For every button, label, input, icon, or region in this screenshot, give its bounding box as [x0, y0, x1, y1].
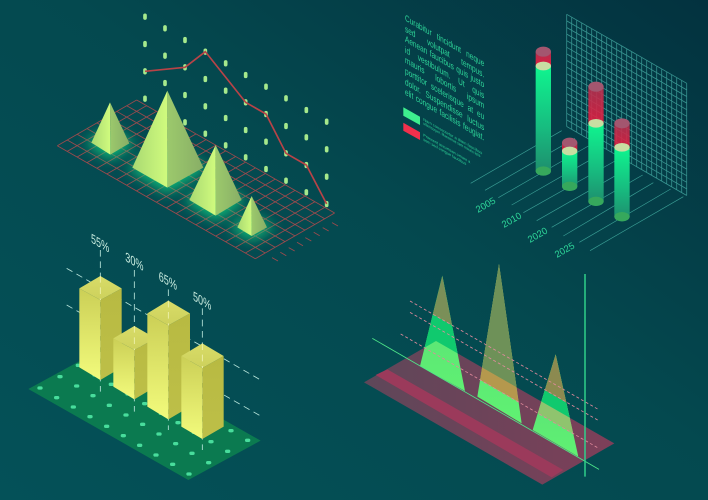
year labels: 2005: [474, 196, 498, 216]
back wall grid: [567, 14, 687, 195]
pyramid 1: [91, 102, 129, 155]
vertical axis: [583, 274, 587, 477]
year labels: 2025: [553, 241, 577, 261]
cylinder 2010: [562, 138, 577, 191]
bar 65%: [147, 301, 190, 419]
paragraph: mauris lobortis ipsum: [405, 55, 484, 111]
triangle 2: [477, 264, 522, 424]
floor grid: [57, 100, 335, 259]
panel: cylinder chart with text: [403, 12, 687, 261]
paragraph: dolor. Suspendisse luctus: [405, 76, 484, 132]
green floor: [28, 350, 261, 480]
cylinder 2020: [588, 82, 604, 206]
floor plane: [364, 341, 614, 485]
triangle 1: [420, 276, 465, 391]
legend swatch: green: [403, 107, 420, 125]
paragraph: elit congue facilisis feugiat.: [405, 87, 484, 143]
paragraph: Curabitur tincidunt neque: [405, 12, 484, 69]
floor red stripe: [376, 369, 563, 477]
baseline: [372, 338, 599, 469]
percent labels: 30%: [125, 249, 144, 275]
grid edge ticks: [272, 223, 338, 261]
paragraph: Aenean faucibus quis justo: [405, 34, 484, 90]
panel: 3D bar chart: [28, 230, 261, 480]
cylinder 2005: [536, 47, 551, 176]
year labels: [474, 196, 577, 261]
panel: triangle area chart: [360, 260, 627, 485]
legend: [403, 107, 482, 166]
panel: pyramid chart with line graph: [57, 15, 338, 261]
pyramid 3: [189, 145, 242, 216]
red line graph: [145, 52, 327, 204]
paragraph: id vestibulum. Ut quis: [405, 44, 484, 100]
year labels: 2020: [526, 226, 550, 246]
floor lines: [471, 131, 683, 251]
legend swatch: red: [403, 123, 420, 140]
percent labels: 50%: [193, 288, 212, 314]
pyramid 2: [132, 91, 203, 188]
legend text: Praesent accumsan ornare a: [423, 132, 471, 164]
paragraph: [405, 12, 486, 150]
floor dots: [39, 355, 249, 474]
year labels: 2010: [500, 211, 524, 231]
pyramid 4: [237, 196, 267, 236]
bar 55%: [79, 276, 122, 380]
bar 50%: [181, 343, 224, 439]
paragraph: porttitor scelerisque at eu: [405, 65, 484, 122]
cylinder 2025: [614, 118, 630, 221]
percent labels: [91, 230, 212, 314]
bar 30%: [113, 326, 156, 399]
legend text: Nam consectetur a diam faucibus: [423, 117, 482, 155]
legend text: ullamcorper. Maecenas sem mauris felis: [423, 121, 480, 158]
dashed guide lines: [67, 250, 261, 450]
legend text: sem sed congue faucibus: [423, 137, 466, 166]
dashed level lines: [401, 301, 599, 449]
percent labels: 55%: [91, 230, 110, 256]
percent labels: 65%: [159, 268, 177, 294]
triangle 3: [532, 354, 578, 456]
scatter dots: [145, 15, 327, 205]
paragraph: sed volutpat tempus.: [405, 23, 484, 79]
pyramid glow: [85, 128, 275, 241]
